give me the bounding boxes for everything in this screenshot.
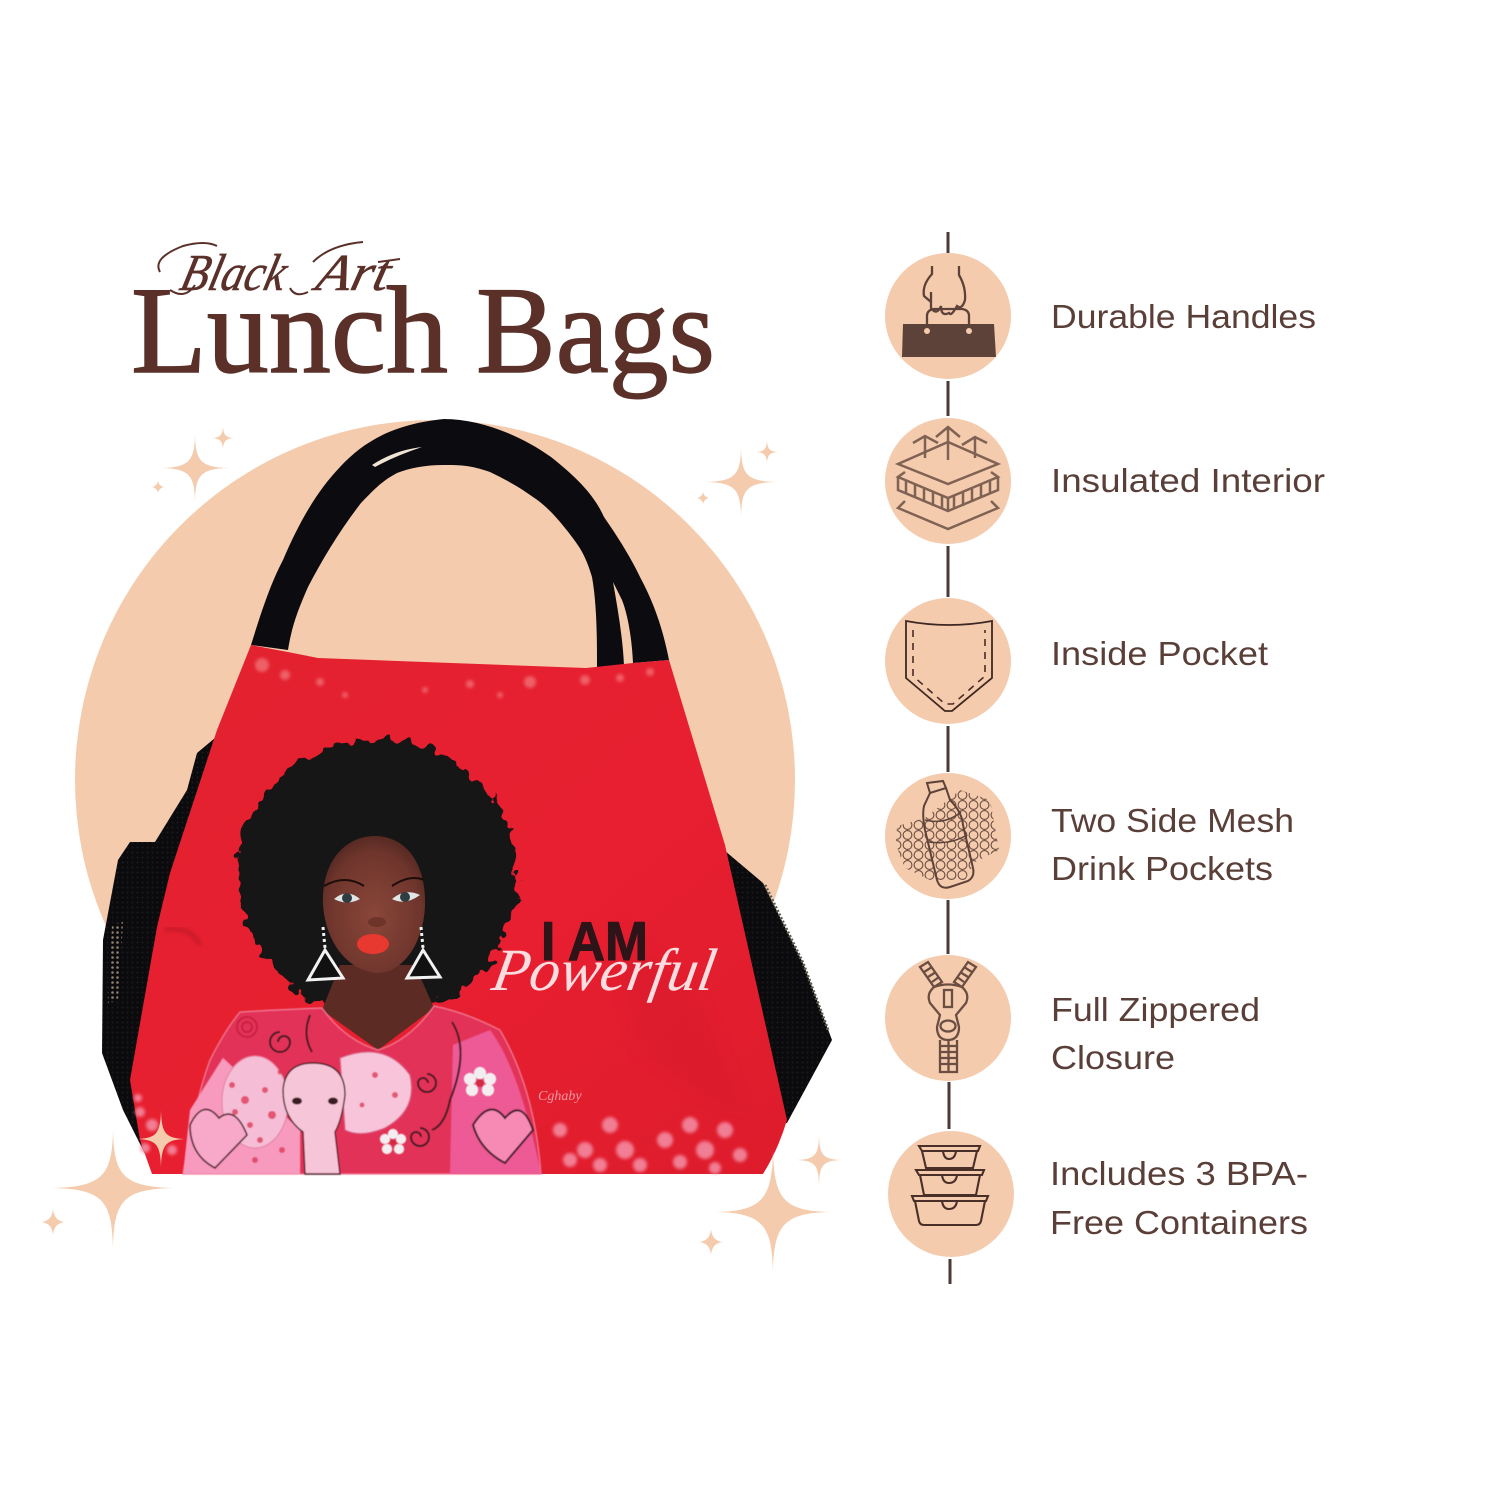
- label: Two Side Mesh: [1051, 802, 1294, 839]
- sparkles: lower right: [699, 1135, 842, 1272]
- label: [1050, 1155, 1308, 1241]
- earrings: [308, 927, 440, 980]
- bottom bokeh: [134, 1094, 747, 1174]
- afro hair: [238, 738, 518, 1005]
- shirt pattern: [183, 1015, 541, 1174]
- label: Insulated Interior: [1051, 462, 1325, 499]
- label: Free Containers: [1050, 1204, 1308, 1241]
- feature: BPA-free containers: [888, 1131, 1308, 1257]
- artist signature: Cghaby: [538, 1089, 582, 1104]
- swirls: [237, 1015, 461, 1146]
- label: Full Zippered: [1051, 991, 1260, 1028]
- icon: pocket: [885, 598, 1011, 724]
- sparkles: upper left: [152, 427, 234, 502]
- icon: zipper: [885, 955, 1011, 1081]
- neck: [322, 965, 434, 1050]
- bag slogan: [487, 910, 721, 1104]
- icon: bottle and mesh: [885, 773, 1011, 899]
- icon: hand holding bag: [885, 253, 1011, 379]
- script heading: Black Art: [158, 242, 400, 302]
- icon: stacked containers: [888, 1131, 1014, 1257]
- red speckles: [229, 1070, 398, 1163]
- icon: insulation layers: [885, 418, 1011, 544]
- shirt: [183, 1006, 541, 1174]
- sparkles: lower left: [41, 1110, 186, 1248]
- script heading: Black Art: Art: [308, 245, 399, 302]
- title: [131, 242, 715, 399]
- feature: zippered closure: [885, 955, 1260, 1081]
- right shirt panel: [450, 1030, 541, 1174]
- left heart: [190, 1109, 247, 1168]
- background circle: [75, 420, 795, 1140]
- lunch bag: [102, 419, 832, 1174]
- feature: durable handles: [885, 253, 1316, 379]
- right heart: [473, 1109, 533, 1163]
- label: Inside Pocket: [1051, 635, 1268, 672]
- elephant ears: [222, 1056, 288, 1148]
- sparkles: upper right: [697, 441, 778, 517]
- timeline connector: [948, 232, 950, 1284]
- feature: insulated interior: [885, 418, 1325, 544]
- label: Includes 3 BPA-: [1050, 1155, 1308, 1192]
- elephant head and trunk: [283, 1063, 345, 1174]
- label: [1051, 991, 1260, 1076]
- label: Closure: [1051, 1039, 1175, 1076]
- fabric shading and top bokeh: [165, 658, 745, 1120]
- slogan: I AM: I AM: [541, 910, 648, 972]
- heading: Lunch Bags: Bags: [476, 262, 715, 399]
- face: [323, 836, 425, 973]
- feature: inside pocket: [885, 598, 1268, 724]
- script heading: Black Art: Black: [175, 245, 295, 302]
- label: Drink Pockets: [1051, 850, 1273, 887]
- flowers: [380, 1067, 496, 1154]
- nose: [368, 917, 386, 927]
- label: [1051, 802, 1294, 887]
- slogan: Powerful: Powerful: [487, 937, 721, 1004]
- heading: Lunch Bags: [131, 262, 715, 399]
- red bag body: [130, 645, 787, 1174]
- right mesh pocket: [700, 845, 832, 1125]
- feature: side mesh pockets: [885, 773, 1294, 899]
- portrait illustration: [183, 738, 541, 1174]
- bag handles: [251, 419, 669, 668]
- heading: Lunch Bags: Lunch: [131, 262, 448, 399]
- eyes and brows: [324, 878, 424, 903]
- lips: [357, 934, 389, 954]
- label: Durable Handles: [1051, 298, 1316, 335]
- lower left shirt panel: [183, 1058, 300, 1174]
- left mesh pocket: [102, 738, 215, 1174]
